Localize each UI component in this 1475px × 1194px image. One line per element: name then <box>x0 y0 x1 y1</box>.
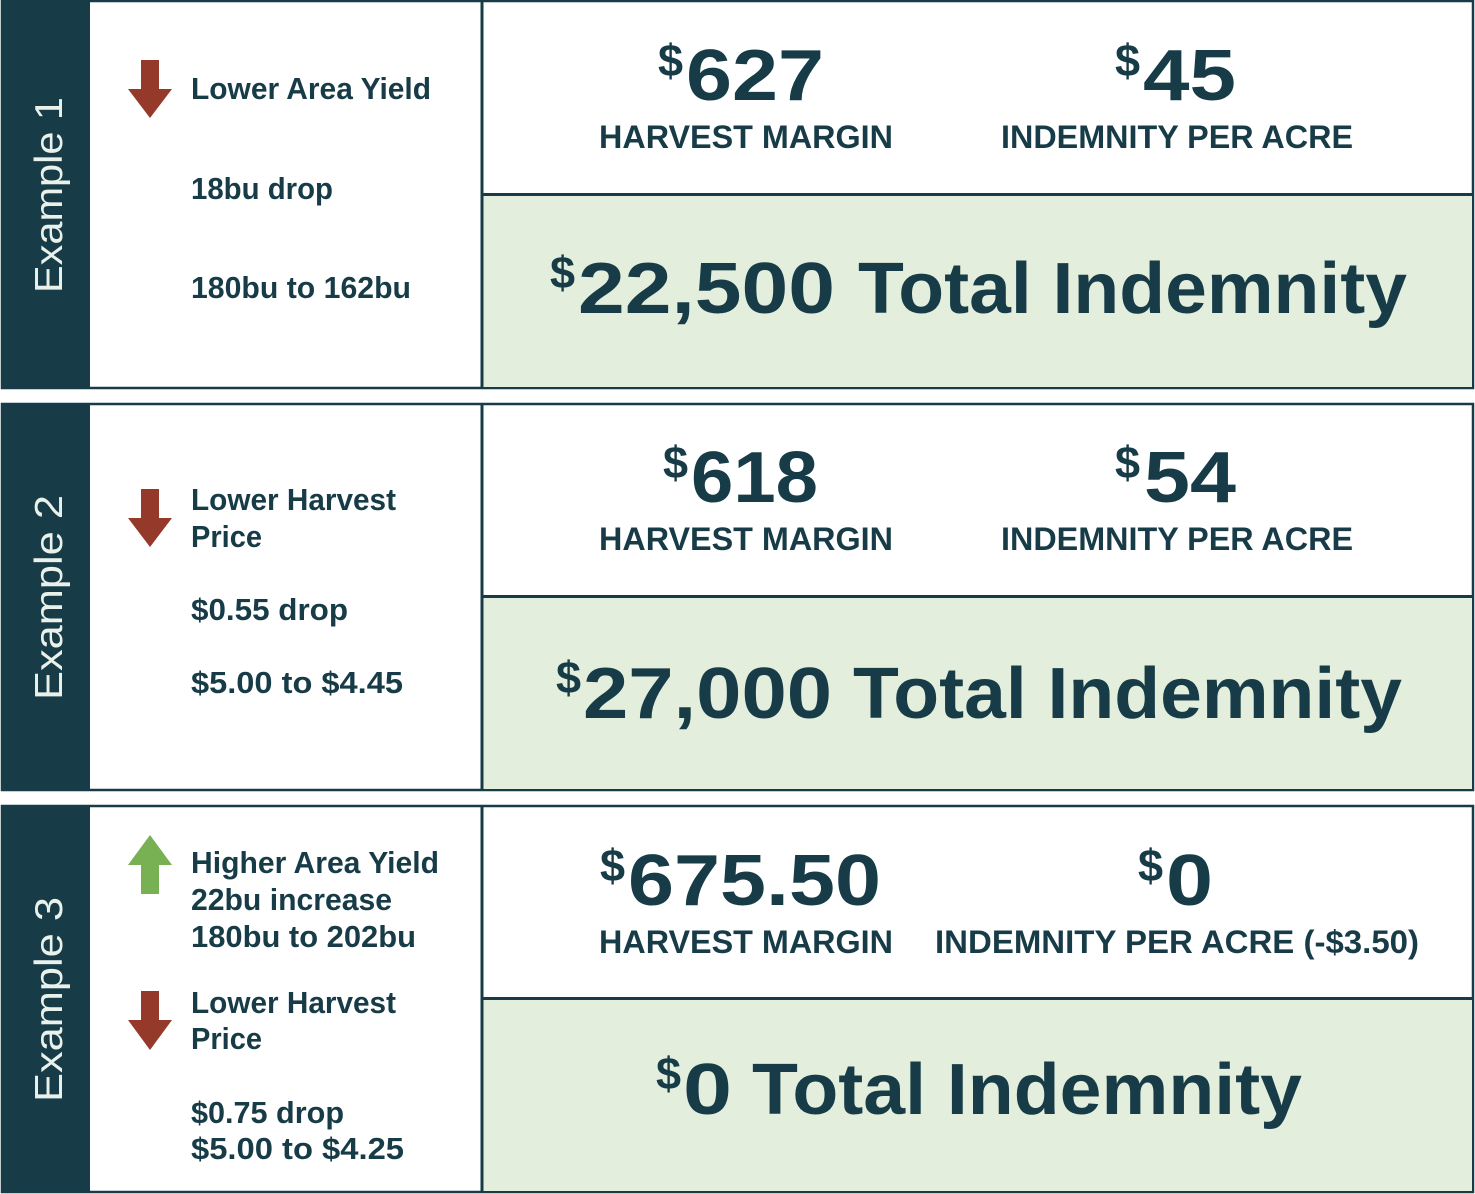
panel: example 2 <box>1 403 1473 790</box>
total indemnity: 0 <box>683 1050 732 1130</box>
total indemnity: 27,000 <box>583 654 832 734</box>
icon: up arrow <box>128 835 172 894</box>
total indemnity: $ <box>556 652 581 703</box>
value: indemnity per acre <box>1115 35 1236 116</box>
total indemnity: $ <box>550 247 575 298</box>
text: lower harvest price <box>191 482 396 554</box>
text: $0.55 drop: $0.55 drop <box>191 592 348 627</box>
text: price drop: $5.00 to $4.25 <box>191 1131 404 1166</box>
value: harvest margin: $ <box>658 35 683 86</box>
text: price drop <box>191 1095 404 1166</box>
value: indemnity per acre <box>1138 840 1213 921</box>
value: harvest margin: 675.50 <box>628 841 881 921</box>
value: indemnity per acre: $ <box>1115 437 1140 488</box>
value: harvest margin: 627 <box>686 36 824 116</box>
label: example 3: Example 3 <box>28 897 71 1102</box>
label: example 2: Example 2 <box>28 495 71 700</box>
total indemnity: 22,500 <box>578 249 835 329</box>
icon: down arrow <box>128 489 172 547</box>
total indemnity: Total Indemnity <box>752 1050 1302 1130</box>
text: lower harvest price: Lower Harvest <box>191 482 396 517</box>
value: indemnity per acre: 0 <box>1166 841 1213 921</box>
panel: example 1 <box>1 0 1473 388</box>
icon: down arrow <box>128 60 172 118</box>
text: higher area yield: 22bu increase <box>191 882 392 917</box>
total indemnity <box>556 652 1402 734</box>
text: lower harvest price: Lower Harvest <box>191 985 396 1020</box>
panel: example 3 <box>1 805 1473 1192</box>
text: higher area yield: Higher Area Yield <box>191 845 439 880</box>
text: price drop: $0.75 drop <box>191 1095 344 1130</box>
value: indemnity per acre: $ <box>1138 840 1163 891</box>
text: lower harvest price: Price <box>191 519 262 554</box>
text: $5.00 to $4.45: $5.00 to $4.45 <box>191 665 403 700</box>
value: harvest margin: $ <box>663 437 688 488</box>
caption: harvest margin: HARVEST MARGIN <box>599 924 893 960</box>
caption: indemnity per acre: INDEMNITY PER ACRE (-$3.50) <box>935 924 1419 960</box>
text: higher area yield: 180bu to 202bu <box>191 919 416 954</box>
caption: harvest margin: HARVEST MARGIN <box>599 119 893 155</box>
text: 18bu drop: 18bu drop <box>191 171 333 206</box>
value: indemnity per acre: 54 <box>1144 438 1236 518</box>
icon: down arrow <box>128 991 172 1050</box>
value: harvest margin: $ <box>600 840 625 891</box>
caption: indemnity per acre: INDEMNITY PER ACRE <box>1001 119 1353 155</box>
value: indemnity per acre <box>1115 437 1236 518</box>
total indemnity: Total Indemnity <box>853 654 1402 734</box>
total indemnity: Total Indemnity <box>858 249 1407 329</box>
text: lower harvest price: Price <box>191 1021 262 1056</box>
text: 180bu to 162bu: 180bu to 162bu <box>191 270 411 305</box>
value: indemnity per acre: $ <box>1115 35 1140 86</box>
text: higher area yield <box>191 845 439 954</box>
value: harvest margin: 618 <box>691 438 818 518</box>
total indemnity: $ <box>656 1048 681 1099</box>
caption: indemnity per acre: INDEMNITY PER ACRE <box>1001 521 1353 557</box>
total indemnity <box>550 247 1407 329</box>
value: indemnity per acre: 45 <box>1143 36 1236 116</box>
text: lower harvest price <box>191 985 396 1056</box>
caption: harvest margin: HARVEST MARGIN <box>599 521 893 557</box>
label: example 1: Example 1 <box>28 97 71 293</box>
text: lower area yield: Lower Area Yield <box>191 71 431 106</box>
